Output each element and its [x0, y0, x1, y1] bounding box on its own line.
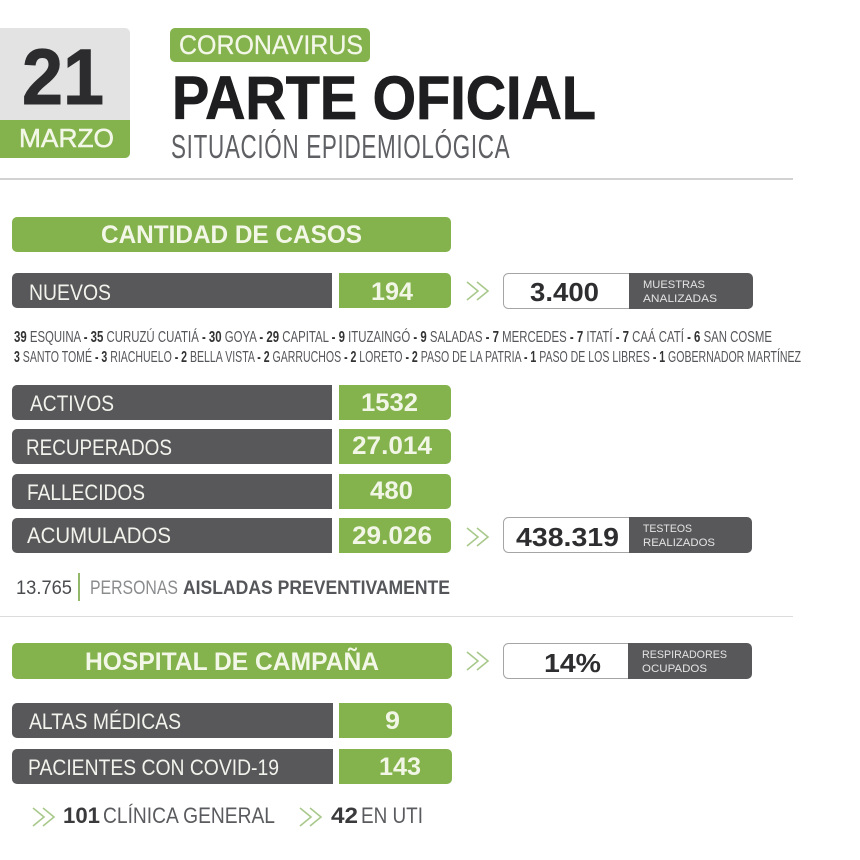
date badge	[0, 28, 130, 158]
row: pacientes con covid-19	[12, 749, 452, 784]
section heading: hospital de campaña: HOSPITAL DE CAMPAÑA	[85, 646, 379, 676]
row: pacientes con covid-19: 143	[379, 753, 421, 781]
text block: casos por localidad: 3 SANTO TOMÉ - 3 RIACHUELO - 2 BELLA VISTA - 2 GARRUCHOS - 2 LORETO - 2 PASO DE LA PATRIA - 1 PASO DE LOS LIBRES - 1 GOBERNADOR MARTÍNEZ	[14, 347, 801, 366]
callout: muestras analizadas: 3.400	[530, 277, 599, 307]
text block: casos por localidad	[14, 327, 801, 366]
tag: coronavirus: CORONAVIRUS	[179, 30, 363, 60]
icon: chevrons	[467, 282, 488, 300]
row: fallecidos: FALLECIDOS	[27, 480, 145, 505]
row: altas médicas	[12, 703, 452, 738]
text block: clínica general: CLÍNICA GENERAL	[103, 803, 275, 828]
callout: testeos realizados: 438.319	[516, 522, 619, 552]
callout: respiradores ocupados: 14%	[544, 648, 601, 678]
row: recuperados: 27.014	[352, 432, 432, 460]
row: fallecidos: 480	[370, 477, 413, 505]
row: fallecidos	[12, 474, 451, 509]
row: recuperados: RECUPERADOS	[26, 435, 172, 460]
text block: personas aisladas: 13.765	[16, 578, 72, 599]
date badge: MARZO	[19, 123, 114, 153]
row: nuevos: NUEVOS	[29, 280, 111, 305]
row: activos	[12, 385, 451, 420]
icon: chevrons	[467, 652, 488, 670]
row: acumulados	[12, 518, 451, 553]
text block: personas aisladas	[16, 573, 450, 601]
text block: en uti: 42	[331, 803, 358, 828]
date badge: 21	[22, 32, 104, 121]
text block: personas aisladas: AISLADAS PREVENTIVAMENTE	[183, 578, 450, 599]
callout: testeos realizados	[504, 517, 752, 553]
row: nuevos	[12, 273, 451, 308]
callout: testeos realizados: REALIZADOS	[643, 537, 715, 549]
row: pacientes con covid-19: PACIENTES CON COVID-19	[28, 755, 279, 780]
row: nuevos: 194	[371, 278, 413, 306]
subtitle: SITUACIÓN EPIDEMIOLÓGICA	[171, 128, 510, 165]
callout: respiradores ocupados	[504, 643, 752, 679]
title: PARTE OFICIAL	[172, 64, 596, 132]
row: altas médicas: 9	[385, 707, 400, 735]
icon: chevrons	[467, 528, 488, 546]
row: activos: 1532	[361, 389, 418, 417]
callout: respiradores ocupados: OCUPADOS	[642, 663, 707, 675]
callout: muestras analizadas: ANALIZADAS	[643, 293, 717, 305]
callout: muestras analizadas	[504, 273, 753, 309]
text block: en uti: EN UTI	[361, 803, 423, 828]
text block: clínica general: 101	[63, 803, 100, 828]
row: activos: ACTIVOS	[30, 391, 114, 416]
text block: personas aisladas: PERSONAS	[90, 578, 178, 599]
text block: en uti	[300, 803, 423, 828]
section heading: cantidad de casos: CANTIDAD DE CASOS	[101, 221, 362, 249]
section heading: hospital de campaña	[12, 643, 452, 679]
callout: respiradores ocupados: RESPIRADORES	[642, 649, 727, 661]
text block: clínica general	[33, 803, 275, 828]
callout: muestras analizadas: MUESTRAS	[643, 279, 705, 291]
row: altas médicas: ALTAS MÉDICAS	[29, 709, 181, 734]
row: acumulados: 29.026	[352, 522, 432, 550]
section heading: cantidad de casos	[12, 217, 451, 252]
row: acumulados: ACUMULADOS	[27, 523, 171, 548]
row: recuperados	[12, 429, 451, 464]
callout: testeos realizados: TESTEOS	[643, 523, 692, 535]
text block: casos por localidad: 39 ESQUINA - 35 CURUZÚ CUATIÁ - 30 GOYA - 29 CAPITAL - 9 ITUZAINGÓ - 9 SALADAS - 7 MERCEDES - 7 ITATÍ - 7 CAÁ CATÍ - 6 SAN COSME	[14, 327, 772, 346]
